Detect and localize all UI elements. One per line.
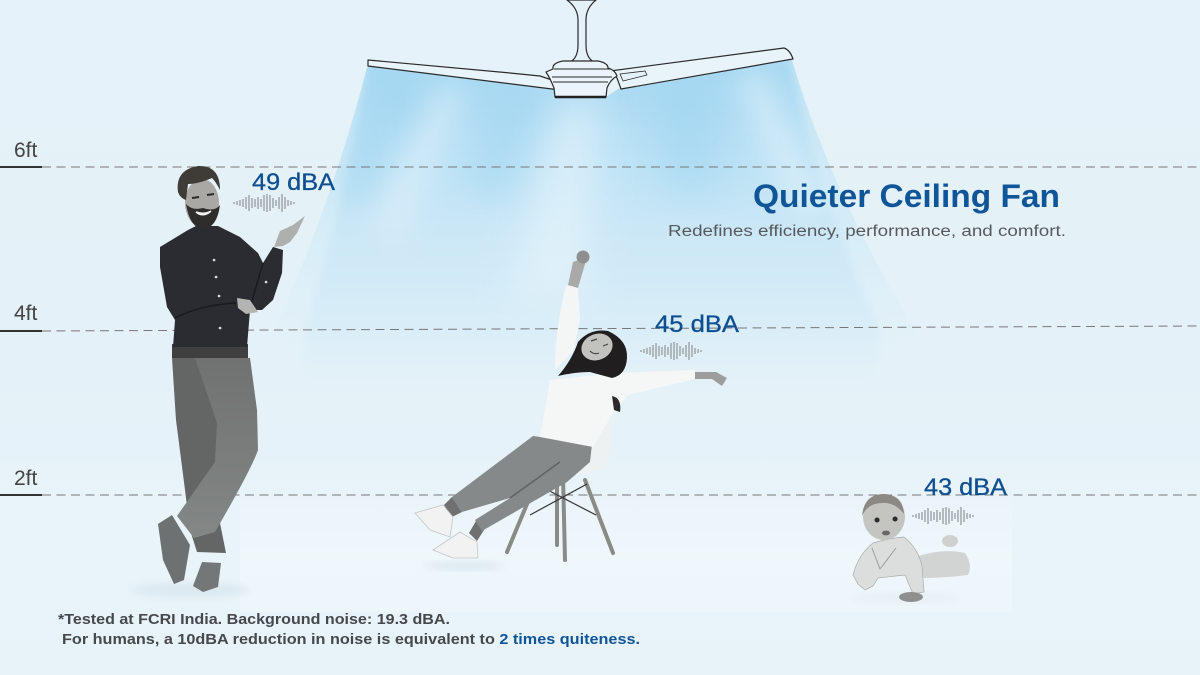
baby legs [918, 551, 970, 578]
baby shadow [850, 593, 960, 603]
man back leg [172, 358, 226, 553]
fan blade bracket [620, 71, 647, 81]
icon: sound wave 45 dBA [641, 342, 701, 360]
chair legs [507, 475, 613, 560]
fan hub base [555, 96, 606, 98]
chair cross wires [530, 484, 596, 515]
icon: sound wave 49 dBA [234, 194, 294, 212]
man figure [130, 166, 305, 597]
baby foot [942, 535, 958, 547]
footnote line 1: *Tested at FCRI India. Background noise: 19.3 dBA. [58, 612, 450, 628]
air flow from fan [300, 60, 881, 342]
baby [850, 494, 970, 603]
man hair [178, 166, 220, 200]
man shoes [158, 515, 190, 584]
woman hair [558, 330, 627, 378]
height guide: 4ft: 4ft [14, 302, 38, 325]
fan motor hub [546, 61, 617, 97]
man crossed hand [237, 298, 258, 314]
woman on chair [415, 250, 727, 570]
height guide: 2ft: 2ft [14, 467, 38, 490]
height guide: 6ft: 6ft [14, 139, 38, 162]
footnote [58, 612, 640, 648]
baby eyes [877, 519, 895, 520]
man arm seam [175, 263, 263, 318]
panel: floor glow [240, 497, 1012, 612]
man front leg [177, 358, 258, 538]
woman shadow [425, 562, 505, 570]
ceiling fan [368, 0, 793, 97]
man belt [172, 344, 248, 358]
woman legs seam [510, 462, 560, 498]
chair shell [540, 412, 612, 474]
woman closed eyes and smile [590, 339, 608, 354]
man shirt [160, 226, 283, 347]
woman raised fist [576, 250, 590, 264]
heading: Quieter Ceiling Fan [753, 178, 1060, 214]
icon: sound wave 43 dBA [913, 507, 973, 525]
man shadow [130, 583, 250, 597]
man beard [186, 204, 220, 229]
woman face [577, 329, 617, 365]
woman outstretched hand [695, 372, 727, 386]
fan downrod [567, 0, 596, 62]
fan hub rings [552, 69, 612, 82]
subheading: Redefines efficiency, performance, and comfort. [668, 223, 1066, 240]
woman jeans [452, 436, 592, 531]
label: 49 dBA: 49 dBA [252, 169, 335, 196]
woman hair strand [612, 396, 620, 412]
footnote line 2: For humans, a 10dBA reduction in noise is equivalent to 2 times quiteness. [62, 632, 640, 648]
label: 45 dBA: 45 dBA [655, 311, 739, 338]
height guide: 4ft [0, 302, 1200, 331]
label: 43 dBA: 43 dBA [924, 474, 1007, 501]
man smile [196, 211, 211, 215]
baby neckline [872, 548, 896, 569]
man hand and finger [274, 216, 305, 247]
baby hand [899, 592, 923, 602]
woman blouse [540, 370, 695, 447]
fan left blade [368, 60, 560, 90]
woman raised forearm [568, 257, 586, 288]
woman shoes [415, 505, 453, 537]
baby head [863, 494, 905, 540]
fan right blade [610, 48, 793, 89]
man shirt buttons [214, 260, 266, 328]
baby hair [862, 494, 904, 516]
woman ankles [444, 497, 484, 541]
man face [185, 179, 219, 227]
man eyes [192, 194, 214, 198]
baby torso and arms [853, 537, 924, 594]
woman raised sleeve [555, 285, 580, 370]
baby mouth [882, 531, 890, 535]
